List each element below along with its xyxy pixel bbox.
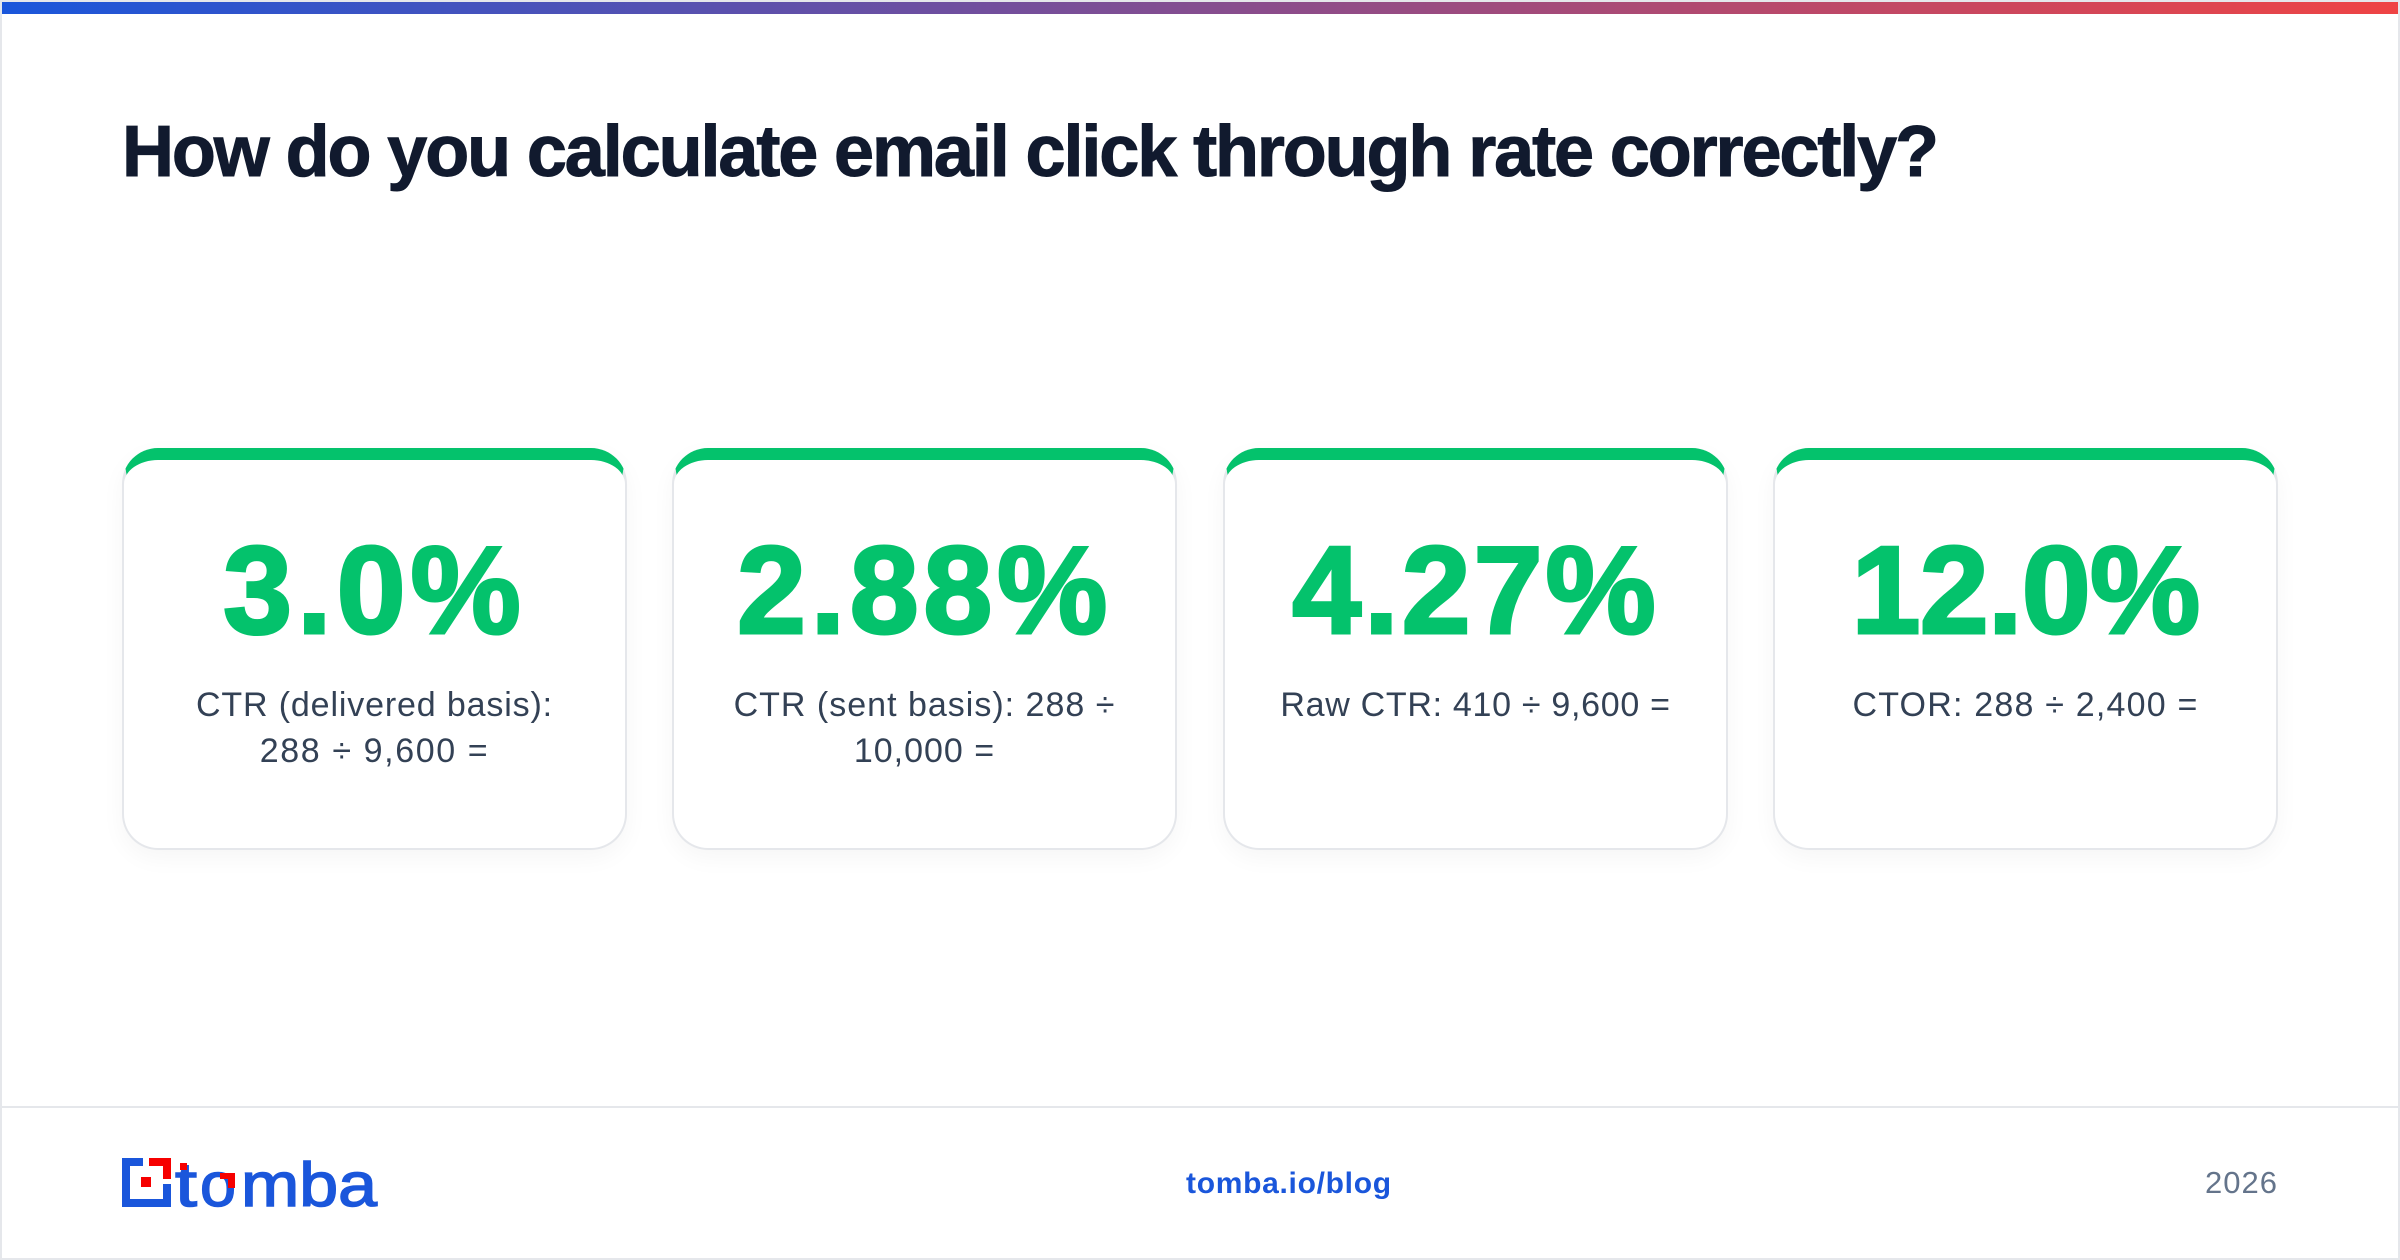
wordmark: t: [175, 1151, 197, 1220]
description: sent basis line 1: CTR (sent basis): 288 ÷: [734, 686, 1115, 724]
wordmark: mba: [241, 1151, 378, 1220]
icon: wordmark accents: [180, 1163, 235, 1188]
footer divider: [2, 1106, 2398, 1108]
card: CTR sent basis: [672, 448, 1177, 850]
wordmark: o: [200, 1151, 236, 1220]
logo: tomba: [122, 1151, 378, 1220]
icon: logo mark: [122, 1158, 171, 1207]
card: raw CTR: [1223, 448, 1728, 850]
footer link: tomba.io/blog: [1186, 1167, 1392, 1200]
description: CTOR: CTOR: 288 ÷ 2,400 =: [1852, 686, 2199, 724]
description: sent basis line 2: 10,000 =: [854, 732, 995, 770]
footer year: 2026: [2205, 1165, 2278, 1200]
metric: 4.27%: 4.27%: [1292, 522, 1659, 660]
title: How do you calculate email click through rate correctly?: [122, 112, 1937, 192]
description: raw CTR: Raw CTR: 410 ÷ 9,600 =: [1280, 686, 1671, 724]
metric: 2.88%: 2.88%: [737, 522, 1112, 660]
description: delivered basis line 2: 288 ÷ 9,600 =: [260, 732, 489, 770]
card: CTOR: [1773, 448, 2278, 850]
card: CTR delivered basis: [122, 448, 627, 850]
metric: 12.0%: 12.0%: [1851, 522, 2200, 660]
top gradient bar: [2, 2, 2398, 14]
metric: 3.0%: 3.0%: [223, 522, 526, 660]
description: delivered basis line 1: CTR (delivered basis):: [196, 686, 553, 724]
